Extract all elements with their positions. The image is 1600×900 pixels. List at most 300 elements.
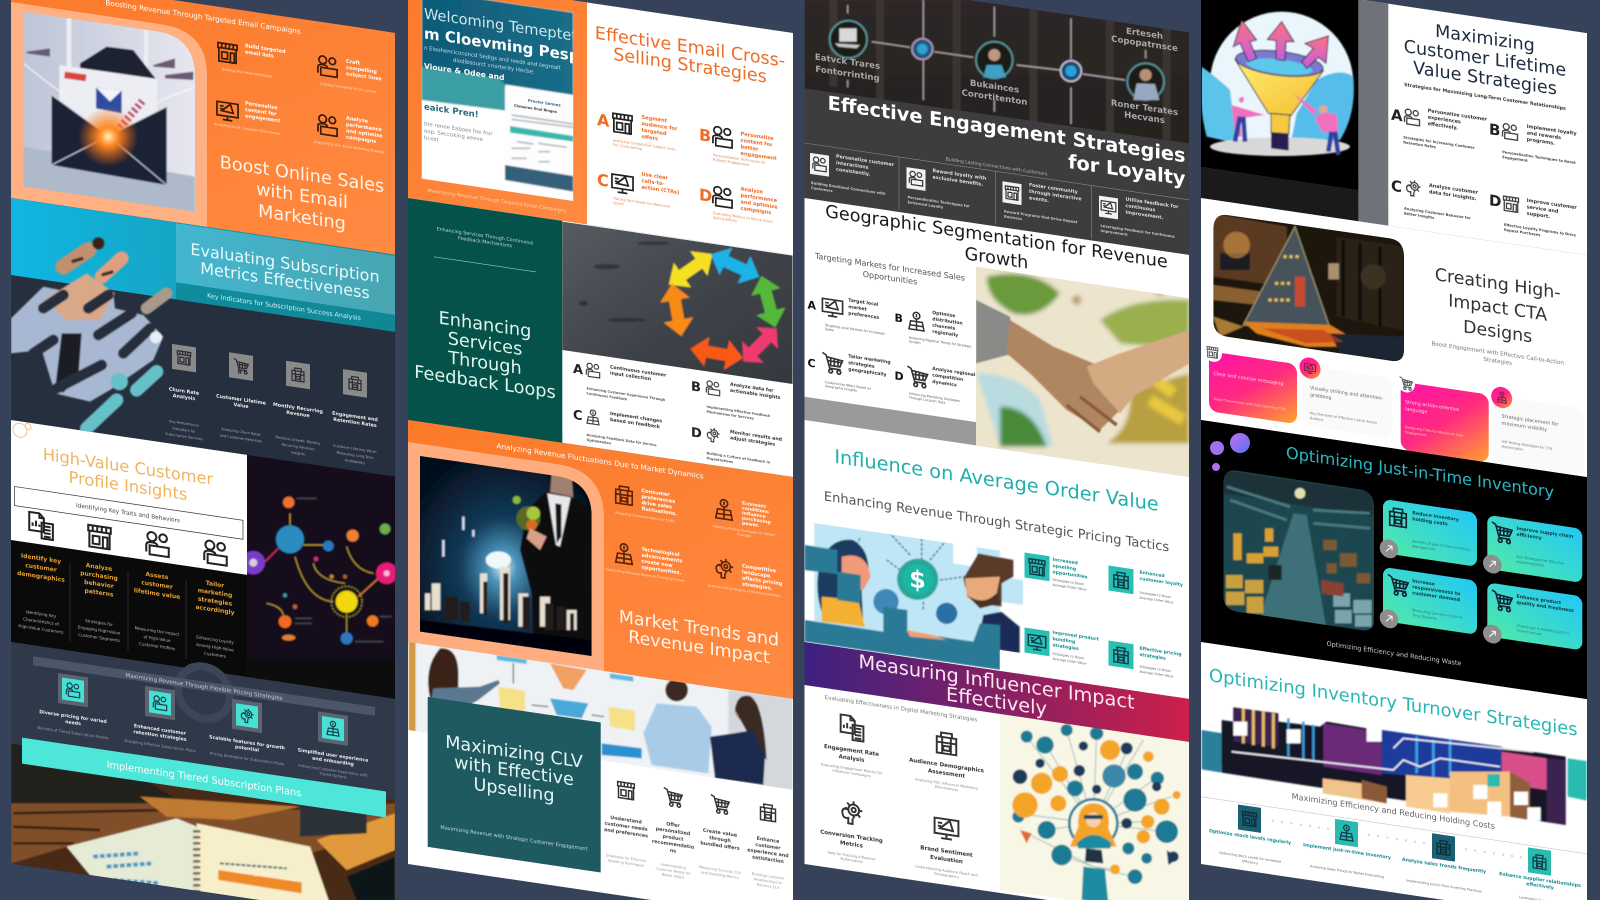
item: bundles: Create value [703, 829, 737, 839]
title: Boost Online Sales [220, 153, 384, 197]
photo: handshake over world map [976, 266, 1189, 477]
item C: C [573, 408, 583, 424]
item: build lists: Build targeted [245, 43, 286, 55]
item C: Upsell [613, 201, 624, 206]
column: purchasing: purchasing [80, 570, 118, 582]
item: upselling: Strategies to Boost [1052, 578, 1084, 586]
cell 1: consistently. [836, 167, 870, 178]
item: bundling [1024, 626, 1100, 668]
item B: Implement loyalty [1527, 124, 1577, 137]
subtitle: Evaluating Effectiveness in Digital Marketing Strategies [825, 695, 977, 724]
cell 4: Utilize feedback for [1126, 198, 1178, 210]
card 2: Visually striking and attention- [1310, 386, 1383, 402]
garbled diagram labels: Copopatrnsce [1111, 34, 1178, 54]
item: loyalty: Average Order Value [1140, 596, 1173, 605]
card 2: Key Strategies for Effective [1516, 555, 1564, 566]
item C: based on feedback [610, 417, 661, 430]
card 3: language [1405, 406, 1427, 415]
item A: Continuous customer [610, 365, 666, 379]
item B: channels [932, 323, 956, 332]
garbled mockup text: diodibsourct cnorterity Hecbe. [453, 58, 535, 76]
item: experience: satisfaction [752, 854, 784, 865]
item: experience: experience and [747, 847, 789, 859]
slide: Optimizing Inventory Turnover Strategies [1201, 642, 1587, 900]
slide: Maximizing CLV with Effective Upselling [403, 637, 798, 900]
card 1: Management [1412, 544, 1436, 552]
item D: service and [1527, 204, 1559, 215]
card 1 [1380, 498, 1477, 571]
cell 1: Customers [811, 186, 833, 193]
card 2: Buttons [1310, 416, 1323, 422]
item: personalize: Personalize [245, 101, 278, 111]
item: upselling: upselling [1053, 563, 1076, 572]
photo: team at whiteboard [408, 642, 792, 790]
title: Selling Strategies [613, 45, 767, 88]
garbled diagram labels: Fontorrinting [815, 65, 880, 84]
subtitle box: Identifying Key Traits and Behaviors [76, 503, 180, 524]
column: demographics: Characteristics of [23, 616, 59, 627]
item B: content for [741, 138, 773, 149]
item C: data for insights. [1429, 189, 1477, 202]
metric: engagement [821, 711, 883, 780]
caption: Analyzing Email Campaign Performance [214, 122, 280, 136]
column: tailor [195, 578, 235, 660]
card 3: responsiveness to [1412, 584, 1461, 597]
item C [1391, 177, 1479, 227]
garbled diagram labels: Hecvans [1124, 110, 1165, 126]
title: Marketing [258, 202, 346, 235]
garbled diagram labels [815, 0, 1178, 130]
card 2: efficiency [1516, 532, 1542, 541]
item economic [713, 496, 776, 542]
card 4: Time Practices [1516, 629, 1542, 636]
item D: and optimize [741, 199, 778, 211]
title panel: Maximizing Revenue with Strategic Customer Engagement [440, 825, 588, 853]
column: lifetime value: of High-Value [143, 634, 171, 643]
item: retention: Enhanced customer [134, 724, 186, 737]
item: upselling: Average Order Value [1053, 583, 1086, 592]
metric: sentiment: Understanding Audience Reach and [915, 864, 978, 878]
item A: A [808, 298, 816, 313]
item B: B [1489, 120, 1500, 140]
icon: team [318, 55, 337, 77]
cell 1 [810, 150, 895, 202]
metric: lifetime value: and Customer Retention [220, 433, 262, 444]
card 4: Optimization [1502, 445, 1523, 452]
item: analyze: Analyze [346, 116, 368, 125]
item C: action (CTAs) [642, 185, 679, 196]
subtitle: Opportunities [863, 270, 917, 287]
metric: churn: Churn Rate [169, 387, 199, 397]
item: bundling: Average Order Value [1053, 657, 1086, 666]
item: bundling: strategies [1053, 642, 1079, 652]
item D: D [1489, 191, 1501, 211]
photo: connected people diagram [800, 0, 1195, 150]
column: lifetime value: customer [141, 579, 173, 591]
item: diverse pricing: Diverse pricing for varied [39, 710, 107, 725]
photo: ring of colorful arrows [562, 222, 793, 384]
column: tailor: Among High-Value [196, 642, 234, 653]
title: Geographic Segmentation for Revenue [825, 202, 1168, 273]
item: needs [604, 780, 648, 869]
step 1: Optimizing Stock Levels for Increased [1219, 851, 1281, 864]
title: Evaluating Subscription [190, 240, 380, 287]
title panel: Upselling [473, 775, 555, 807]
item B: Personalize [740, 131, 774, 142]
card 3: customer demand [1412, 590, 1460, 603]
cell 3: Reward Programs that Drive Repeat [1004, 210, 1077, 224]
item C: Tailor marketing [848, 354, 891, 366]
step 2: Implement just-in-time inventory [1303, 842, 1391, 861]
item A: market [848, 304, 867, 313]
title: Effective Engagement Strategies [828, 92, 1186, 167]
illustration: funnel with arrows [1201, 12, 1354, 156]
item D: Repeat Purchases [1504, 228, 1540, 237]
item consumer [615, 484, 677, 524]
banner: Implementing Tiered Subscription Plans [107, 760, 301, 799]
cell 3: events. [1029, 195, 1049, 204]
item: subject lines: compelling [346, 65, 377, 75]
column: tailor: Customers [204, 651, 226, 659]
title panel [428, 697, 601, 873]
item C: Geographic Insights [825, 384, 857, 393]
item: retention [125, 683, 196, 753]
item economic: Adapting Pricing Strategies for Market [713, 524, 775, 537]
item: onboarding: Enhancing Customer Experience with [298, 764, 368, 778]
step 3: Analyze sales trends frequently [1402, 857, 1486, 875]
metric: sentiment: Demographics [934, 872, 959, 879]
item: loyalty: Enhanced [1140, 571, 1165, 579]
subtitle: Enhancing Revenue Through Strategic Pricing Tactics [824, 489, 1169, 555]
item economic: Changes [737, 532, 751, 538]
slide: Effective Engagement Strategies for Loyalty [800, 0, 1195, 255]
title: Maximizing [1435, 22, 1535, 56]
item: pricing [1108, 640, 1182, 680]
slide: Measuring Influencer Impact Effectively [804, 642, 1195, 900]
item C: calls-to- [642, 178, 665, 187]
item: loyalty: customer loyalty [1140, 576, 1183, 588]
cell 1: Personalize customer [836, 155, 894, 168]
item competition: Competitive [742, 563, 776, 574]
cell 4: improvement. [1126, 210, 1163, 221]
column: purchasing: Engaging High-Value [78, 624, 121, 636]
item B: B-Boost Engagement [713, 158, 750, 167]
item C: geographically [848, 367, 887, 378]
item C [573, 405, 662, 453]
metric: conversion: Tools for Tracking Influencer [827, 850, 876, 862]
item B: better [741, 144, 759, 153]
title: Growth [965, 244, 1028, 274]
step 3 [1402, 829, 1486, 894]
item A: experiences [1428, 115, 1461, 125]
item: loyalty [1108, 565, 1183, 606]
item A [597, 108, 678, 156]
metric: conversion [820, 796, 883, 867]
garbled mockup text [424, 8, 573, 142]
item D: Analyze [740, 186, 763, 196]
metric: lifetime value: Customer Lifetime [216, 394, 266, 407]
item: analyze: campaigns [346, 135, 376, 145]
cell 3 [1002, 178, 1082, 230]
garbled diagram labels: Eatvck Trares [815, 53, 880, 72]
photo: data pyramid in dark interior [1213, 214, 1404, 362]
banner title: Effectively [946, 683, 1047, 720]
item C: Analyzing Customer Behavior for [1404, 207, 1471, 220]
card 3 [1380, 566, 1477, 641]
column: tailor: Tailor [206, 580, 224, 590]
item D: support. [1527, 211, 1550, 220]
item D: Evaluating Metrics to Refine Cross- [713, 211, 774, 224]
column: tailor: strategies [198, 596, 233, 608]
title: High-Value Customer [43, 445, 213, 489]
garbled mockup text: n Eloohencicoconcd Sedigs and reeds and segrealt [424, 45, 561, 72]
item D: D [691, 425, 702, 442]
column: lifetime value: Customer Profiles [139, 641, 175, 651]
garbled mockup text: the renee Eaboes foe fror [424, 121, 493, 138]
item B [699, 124, 777, 171]
title: Services [448, 328, 522, 360]
item B: Analyzing Regional Trends for Strategic [909, 335, 971, 349]
item: pricing: Strategies to Boost [1140, 665, 1171, 673]
garbled mockup text: eaick Pren! [424, 102, 479, 120]
card 3: Measuring Success in Just-in- [1412, 608, 1463, 620]
title: Impact CTA [1448, 291, 1547, 326]
item: diverse pricing: needs [65, 719, 81, 727]
column: purchasing: Analyze [86, 562, 112, 573]
item technology [605, 541, 685, 583]
illustration: pricing conversation [805, 522, 1023, 670]
card 4: Challenges in Adopting Just-in- [1516, 624, 1570, 636]
slide: Effective Email Cross-Selling Strategies [408, 0, 793, 255]
item B: Optimize [932, 311, 955, 319]
item consumer: fluctuations. [642, 506, 677, 517]
item C [597, 165, 679, 215]
caption: Building Your Smart Effectively [222, 67, 272, 79]
photo: man through rounded stripes [11, 237, 167, 428]
metric: lifetime value: Analyzing Churn Rates [221, 427, 261, 437]
metric: engagement: Evaluating Engagement Metrics for [821, 762, 882, 775]
column: tailor: marketing [198, 587, 232, 599]
item D: Selling Efforts [713, 216, 737, 223]
item: subject lines: Craft [346, 59, 360, 67]
item: offers: ns [670, 849, 676, 855]
item B [1489, 118, 1577, 170]
column: tailor: Enhancing Loyalty [196, 634, 234, 645]
item A [808, 291, 885, 340]
cell 2: Enhanced Loyalty [908, 200, 944, 210]
item A [1391, 103, 1488, 157]
item: bundles [699, 793, 742, 880]
item: experience: Enhance CLV [757, 883, 780, 890]
item D: competition [932, 372, 963, 383]
garbled mockup text: Chnaeree Enol Binges [514, 104, 557, 114]
slide: Market Trends and Revenue Impact [408, 420, 793, 699]
garbled mockup text: Welcoming Temeptet [424, 5, 577, 45]
item: bundling: Strategies to Boost [1052, 652, 1084, 660]
photo tag text: Mocling Aoen Nemu [233, 866, 297, 883]
column: demographics: demographics [17, 570, 65, 584]
connector dots [1272, 819, 1522, 859]
item A: Target local [848, 298, 878, 308]
item A: Personalize customer [1428, 108, 1487, 123]
garbled mockup text: oop. Seccoking aeeve [424, 128, 484, 143]
subtitle box [14, 487, 243, 539]
panel caption: Enhancing Services Through Continuous [437, 227, 533, 247]
photo: bars, line chart and boxes [1202, 707, 1587, 825]
item: onboarding: Simplified user experience [298, 748, 368, 764]
subtitle: Maximizing Efficiency and Reducing Holding Costs [1292, 791, 1495, 831]
item technology: advancements [642, 553, 682, 565]
subtitle: Targeting Markets for Increased Sales [815, 252, 965, 283]
metric: engagement: Profitability [345, 458, 365, 465]
title: Optimizing Just-in-Time Inventory [1286, 443, 1554, 502]
icon: team [318, 114, 337, 136]
card 4 [1491, 385, 1584, 477]
title: Creating High- [1435, 265, 1561, 304]
item competition: affects pricing [742, 575, 783, 587]
item B: engagement [741, 151, 777, 162]
metric: audience: Effectiveness [935, 785, 958, 792]
item D: performance [741, 193, 778, 204]
item competition: Understanding Margins in Shrinking Markets [708, 583, 781, 598]
card 4: quality and freshness [1516, 600, 1574, 614]
caption: Overcoming Your Email Marketing Strategy [314, 140, 384, 154]
metric: churn: Key Performance [169, 419, 199, 428]
slide: Creating High-Impact CTA Designs [1201, 198, 1587, 477]
item: needs: Upselling Techniques [608, 859, 644, 868]
garbled diagram labels: Bukainces [970, 79, 1019, 96]
column: purchasing: behavior [84, 579, 114, 590]
card 1: holding costs [1412, 516, 1448, 528]
icon: store [218, 42, 237, 64]
illustration: influencer network [1000, 714, 1189, 900]
metric: engagement: Engagement Rate [824, 744, 879, 758]
item: upselling: Increased [1052, 558, 1078, 566]
column: purchasing: Customer Segments [78, 632, 120, 643]
item: upselling [1024, 553, 1088, 592]
metric: revenue: Revenue Growth: Monthly [275, 435, 321, 446]
slide: High-Value Customer Profile Insights [11, 420, 400, 707]
slide: Geographic Segmentation for Revenue Growth [804, 198, 1200, 487]
column: demographics [17, 552, 65, 635]
card 4: Strategic placement for [1502, 415, 1558, 428]
metric: audience: Assessment [928, 768, 965, 780]
item B: B [895, 311, 903, 326]
metric: audience: Audience Demographics [909, 758, 984, 775]
banner title [804, 642, 1189, 742]
step 2 [1303, 814, 1391, 880]
step 3: Implementing Just-in-Time Inventory Practices [1406, 878, 1482, 894]
card 2 [1300, 356, 1392, 438]
column: purchasing: Strategies for [85, 618, 113, 627]
icon: monitor [217, 101, 238, 122]
slide: Boost Online Sales with Email Marketing [11, 0, 395, 255]
metric: conversion: Performance [840, 857, 863, 864]
item: needs: customer needs [604, 821, 648, 833]
item C [808, 347, 891, 398]
title: Effective Email Cross- [595, 24, 785, 72]
item C: Implement changes [610, 412, 662, 425]
title: Optimizing Inventory Turnover Strategies [1209, 665, 1578, 741]
step 4 [1499, 843, 1581, 900]
panel caption: Feedback Mechanisms [458, 235, 512, 249]
item D: Analyze regional [932, 367, 975, 378]
title: Revenue Impact [628, 627, 770, 668]
card 4 [1483, 582, 1582, 657]
item: diverse pricing: Benefits of Tiered Subscription Models [38, 726, 109, 740]
item A: Enhancing Customer Experience Through [586, 386, 665, 402]
cell 3: Foster community [1029, 183, 1078, 195]
photo: warehouse aisle [1223, 470, 1374, 630]
column: purchasing [78, 561, 121, 643]
card 2: Key Elements of Effective Call-to-Action [1310, 411, 1377, 425]
cell 4: Improvement [1100, 229, 1128, 237]
item A: preferences [848, 311, 879, 321]
band: Maximizing Revenue Through Flexible Pricing Strategies [125, 673, 283, 702]
slide: Maximizing Customer Lifetime Value Strategies [1201, 0, 1587, 255]
card 3 [1397, 373, 1489, 463]
cell 2: Personalization Techniques for [908, 195, 970, 208]
title: for Loyalty [1068, 150, 1186, 190]
item C: Optimization [586, 438, 612, 446]
item D: Building a Culture of Feedback In [706, 451, 770, 465]
item D: Organizations [706, 456, 733, 464]
item: analyze: and optimize [346, 128, 383, 140]
item: needs: and preferences [604, 827, 648, 840]
item C: Analyzing Feedback Data for Service [586, 433, 657, 447]
item consumer: drive sales [642, 500, 672, 511]
item: offers: Better Offers [662, 873, 684, 880]
item: bundles: bundled offers [700, 840, 740, 852]
coin symbol: $ [909, 565, 926, 595]
banner [22, 738, 386, 818]
item technology: Forecasting Revenue Based on Emerging Trends [605, 567, 685, 583]
item A [573, 359, 667, 407]
item: pricing: Effective pricing [1140, 647, 1182, 658]
title: Influence on Average Order Value [834, 445, 1159, 516]
item: subject lines: subject lines [346, 71, 382, 82]
item D: D [699, 185, 712, 206]
item: bundling: Improved product [1052, 631, 1099, 643]
slide: Optimizing Just-in-Time Inventory [1201, 420, 1587, 699]
cell 1: interactions [836, 160, 869, 171]
item A: targeted [642, 128, 667, 137]
title panel: with Effective [454, 753, 574, 791]
item A: Sales [825, 327, 834, 332]
item B: programs. [1527, 137, 1555, 147]
metric: lifetime value: Value [234, 402, 249, 410]
card 1: Reduce inventory [1412, 511, 1459, 523]
card 1: Boost Conversions with Eye-Catching CTAs [1214, 397, 1286, 412]
metric: revenue: Monthly Recurring [273, 403, 323, 415]
card 3: Increase [1412, 579, 1435, 588]
metric: engagement: Influencer Campaigns [832, 769, 871, 778]
item A: Segment [642, 115, 667, 124]
item D: D [895, 369, 904, 384]
metric: engagement: Measuring Long-Term [336, 451, 374, 460]
footer caption: Optimizing Efficiency and Reducing Waste [1327, 640, 1461, 668]
metric: engagement: Customer Lifetime Value: [333, 444, 377, 454]
item: personalize: engagement [245, 113, 281, 125]
item technology: opportunities. [642, 565, 682, 576]
cell 3: through interactive [1029, 189, 1082, 203]
metric: audience [909, 728, 985, 796]
card 1: Benefits of Just-in-Time Inventory [1412, 539, 1470, 552]
column: lifetime value: lifetime value [134, 587, 180, 601]
item competition: landscape [742, 569, 771, 580]
item D: Monitor results and [730, 430, 782, 443]
photo: notebook on wooden desk [7, 737, 400, 900]
